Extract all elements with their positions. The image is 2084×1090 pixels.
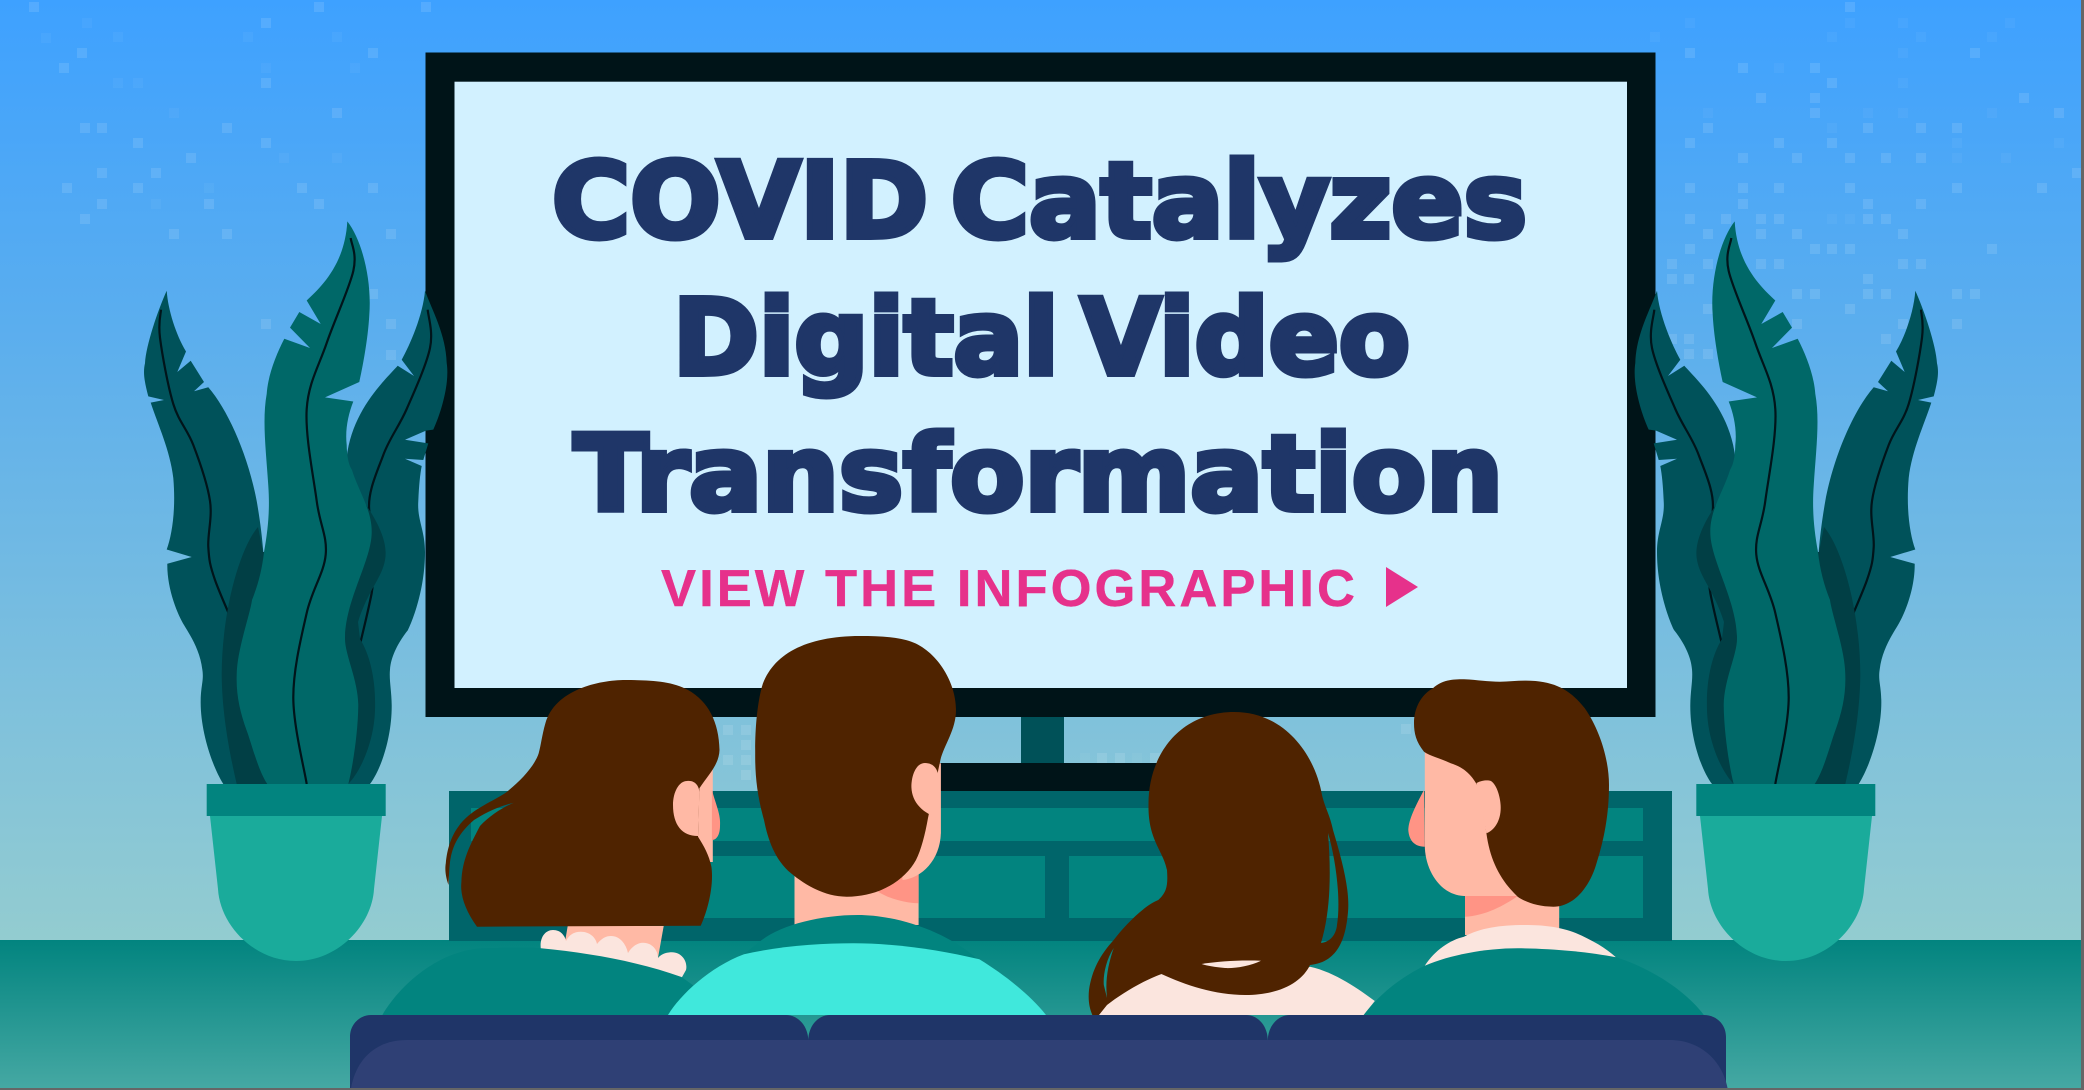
- person 3: woman with long hair: [1089, 712, 1375, 1020]
- ear: [1477, 780, 1501, 833]
- ear: [673, 781, 699, 836]
- right edge: [2081, 0, 2084, 1090]
- ear: [911, 763, 938, 818]
- title: COVID Catalyzes: [552, 140, 1527, 262]
- bottom edge: [0, 1088, 2084, 1090]
- TV screen: [426, 52, 1656, 717]
- hair gap: [1202, 960, 1261, 968]
- title: Digital Video: [673, 277, 1410, 399]
- person 2: man in turquoise shirt: [668, 636, 1046, 1015]
- person 4: man in teal jacket: [1364, 679, 1704, 1015]
- media cabinet: [449, 791, 1672, 941]
- pot: [1696, 784, 1875, 961]
- sofa: [350, 1015, 1728, 1088]
- person 1: woman with bob: [382, 680, 720, 1015]
- icon: play arrow: [1386, 567, 1418, 607]
- call to action: VIEW THE INFOGRAPHIC: [661, 560, 1358, 618]
- TV stand: [925, 717, 1159, 792]
- pot: [207, 784, 386, 961]
- title: [552, 140, 1527, 535]
- title: Transformation: [574, 413, 1503, 535]
- floor: [0, 940, 2081, 1088]
- right plant: [1635, 221, 1938, 961]
- left plant: [144, 221, 447, 961]
